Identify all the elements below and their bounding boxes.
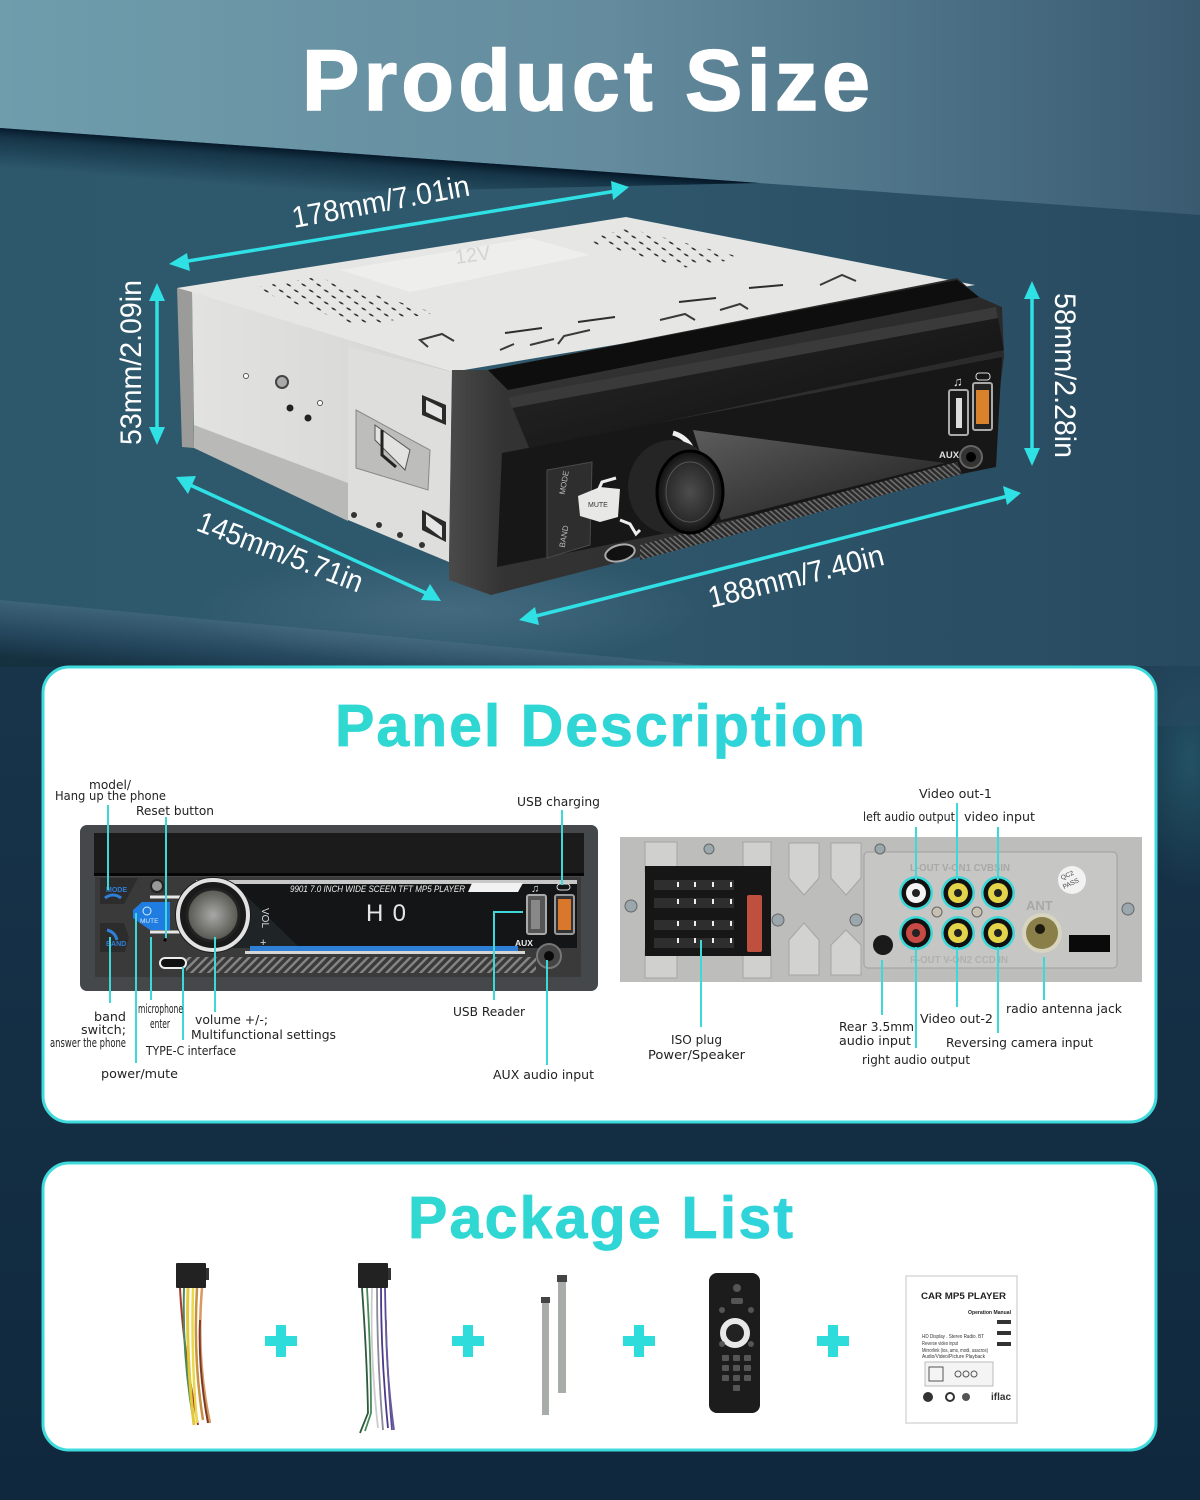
dimension: height 53mm: 53mm/2.09in [115, 280, 148, 445]
operation manual [906, 1276, 1017, 1423]
front panel labels: power/mute [101, 1066, 178, 1081]
band button: BAND [106, 941, 126, 948]
front panel labels: answer the phone [50, 1035, 126, 1050]
USB charging port [555, 884, 574, 934]
rear panel labels: right audio output [862, 1052, 970, 1067]
USB-C port [160, 958, 186, 968]
rear panel labels: audio input [839, 1033, 911, 1048]
front panel labels: USB charging [517, 794, 600, 809]
title: Product Size: Product Size [302, 33, 870, 129]
dimension: faceplate width 188mm [519, 486, 1021, 625]
RCA silkscreen: L-OUT V-ON1 CVBSIN [910, 863, 1010, 874]
rear panel labels: left audio output [863, 809, 955, 824]
front panel labels: band [94, 1009, 126, 1024]
faceplate bezel [449, 278, 1004, 595]
dimension: width 178mm: 178mm/7.01in [289, 170, 472, 235]
front panel leader lines [108, 805, 562, 1065]
USB-C port [604, 542, 636, 564]
operation manual: iflac [991, 1392, 1011, 1403]
VOL label: VOL [259, 908, 270, 928]
front panel labels: volume +/-; [195, 1012, 268, 1027]
digital display: H 0 [366, 900, 406, 927]
rear panel leader lines [701, 803, 1044, 1048]
RCA jacks [899, 876, 1015, 950]
operation manual: HD Display . Stereo Radio. BT [922, 1334, 985, 1340]
wiring harness 2 [358, 1263, 394, 1433]
panel: Package List [43, 1163, 1156, 1450]
AUX jack: AUX [939, 450, 960, 461]
USB ports [949, 373, 992, 435]
product photo: car stereo unit [177, 217, 1004, 595]
lower control panel: BAND [558, 525, 570, 548]
rear panel labels: Video out-2 [920, 1011, 993, 1026]
operation manual: Mirrorlink (ios, ams, modi, usacros) [922, 1348, 988, 1354]
flip screen: 9901 7.0 INCH WIDE SCEEN TFT MP5 PLAYER [730, 391, 903, 441]
AUX jack: AUX [515, 938, 533, 948]
QC sticker [1058, 866, 1086, 894]
front panel labels [50, 777, 600, 1082]
lower control panel: MUTE [588, 502, 608, 509]
dimension: height 58mm [1024, 281, 1081, 466]
front panel labels: enter [150, 1016, 171, 1031]
rear panel labels: Power/Speaker [648, 1047, 746, 1062]
top cover [177, 217, 975, 372]
mode button [100, 878, 138, 904]
mounting brackets [541, 1275, 567, 1415]
band button [100, 923, 129, 952]
rear panel labels: Video out-1 [919, 786, 992, 801]
AUX jack [939, 446, 982, 468]
rear panel labels: video input [964, 809, 1035, 824]
front panel labels: Reset button [136, 803, 214, 818]
front panel labels: switch; [81, 1022, 126, 1037]
operation manual: Operation Manual [968, 1310, 1011, 1316]
rear panel labels: radio antenna jack [1006, 1001, 1123, 1016]
operation manual: Audio/Video/Picture Playback [922, 1354, 985, 1360]
front panel labels: Hang up the phone [55, 788, 166, 803]
dimension: depth 145mm: 145mm/5.71in [192, 506, 368, 599]
volume knob [175, 877, 251, 953]
mounting screws [625, 844, 1134, 926]
top cover: 12V [454, 242, 493, 269]
antenna jack: ANT [1026, 898, 1053, 913]
rear 3.5mm jack [873, 935, 893, 955]
side panel [177, 288, 452, 562]
blue light strip [250, 946, 518, 951]
front panel labels: microphone [138, 1001, 183, 1016]
plus signs [265, 1325, 849, 1357]
dimension: depth 145mm [176, 476, 441, 601]
rear panel illustration: R-OUT V-ON2 CCD IN [910, 955, 1008, 966]
heading: Panel Description: Panel Description [335, 693, 865, 759]
QC sticker: QC2 [1060, 870, 1075, 882]
front panel labels: AUX audio input [493, 1067, 594, 1082]
dimension: height 53mm [115, 280, 165, 445]
front panel illustration [80, 825, 598, 991]
front panel labels: Multifunctional settings [191, 1027, 336, 1042]
AUX jack [515, 938, 561, 968]
ISO connector [645, 866, 771, 956]
QC sticker: PASS [1062, 877, 1081, 891]
USB reader port [527, 883, 546, 934]
rear panel labels: Rear 3.5mm [839, 1019, 914, 1034]
lower control panel [497, 357, 1002, 567]
rear panel labels: Reversing camera input [946, 1035, 1093, 1050]
dimension: width 178mm [169, 170, 629, 271]
dimension: height 58mm: 58mm/2.28in [1048, 293, 1081, 458]
heading: Package List: Package List [408, 1185, 793, 1251]
front panel labels: model/ [89, 777, 132, 792]
front panel labels: USB Reader [453, 1004, 526, 1019]
model text: 9901 7.0 INCH WIDE SCEEN TFT MP5 PLAYER [290, 884, 465, 894]
mode button: MODE [106, 887, 127, 894]
black label [1069, 935, 1110, 952]
panel: Panel Description [43, 667, 1156, 1122]
rear panel labels [648, 786, 1123, 1067]
antenna jack [1022, 898, 1062, 953]
rear panel illustration [620, 837, 1142, 982]
mute button: MUTE [140, 918, 159, 925]
USB ports: ♫ [953, 374, 963, 389]
wiring harness 1 [176, 1263, 210, 1425]
front panel illustration: + [260, 937, 266, 949]
operation manual: CAR MP5 PLAYER [921, 1291, 1006, 1302]
flip screen [488, 280, 1004, 450]
USB reader port: ♫ [531, 883, 539, 895]
operation manual: Reverse video input [922, 1341, 958, 1347]
lower control panel: MODE [558, 470, 571, 495]
remote control [709, 1273, 760, 1413]
rear panel labels: ISO plug [671, 1032, 722, 1047]
mute button [133, 902, 170, 930]
front panel labels: TYPE-C interface [145, 1043, 236, 1058]
dimension: faceplate width 188mm: 188mm/7.40in [705, 539, 887, 615]
volume knob [628, 440, 723, 534]
